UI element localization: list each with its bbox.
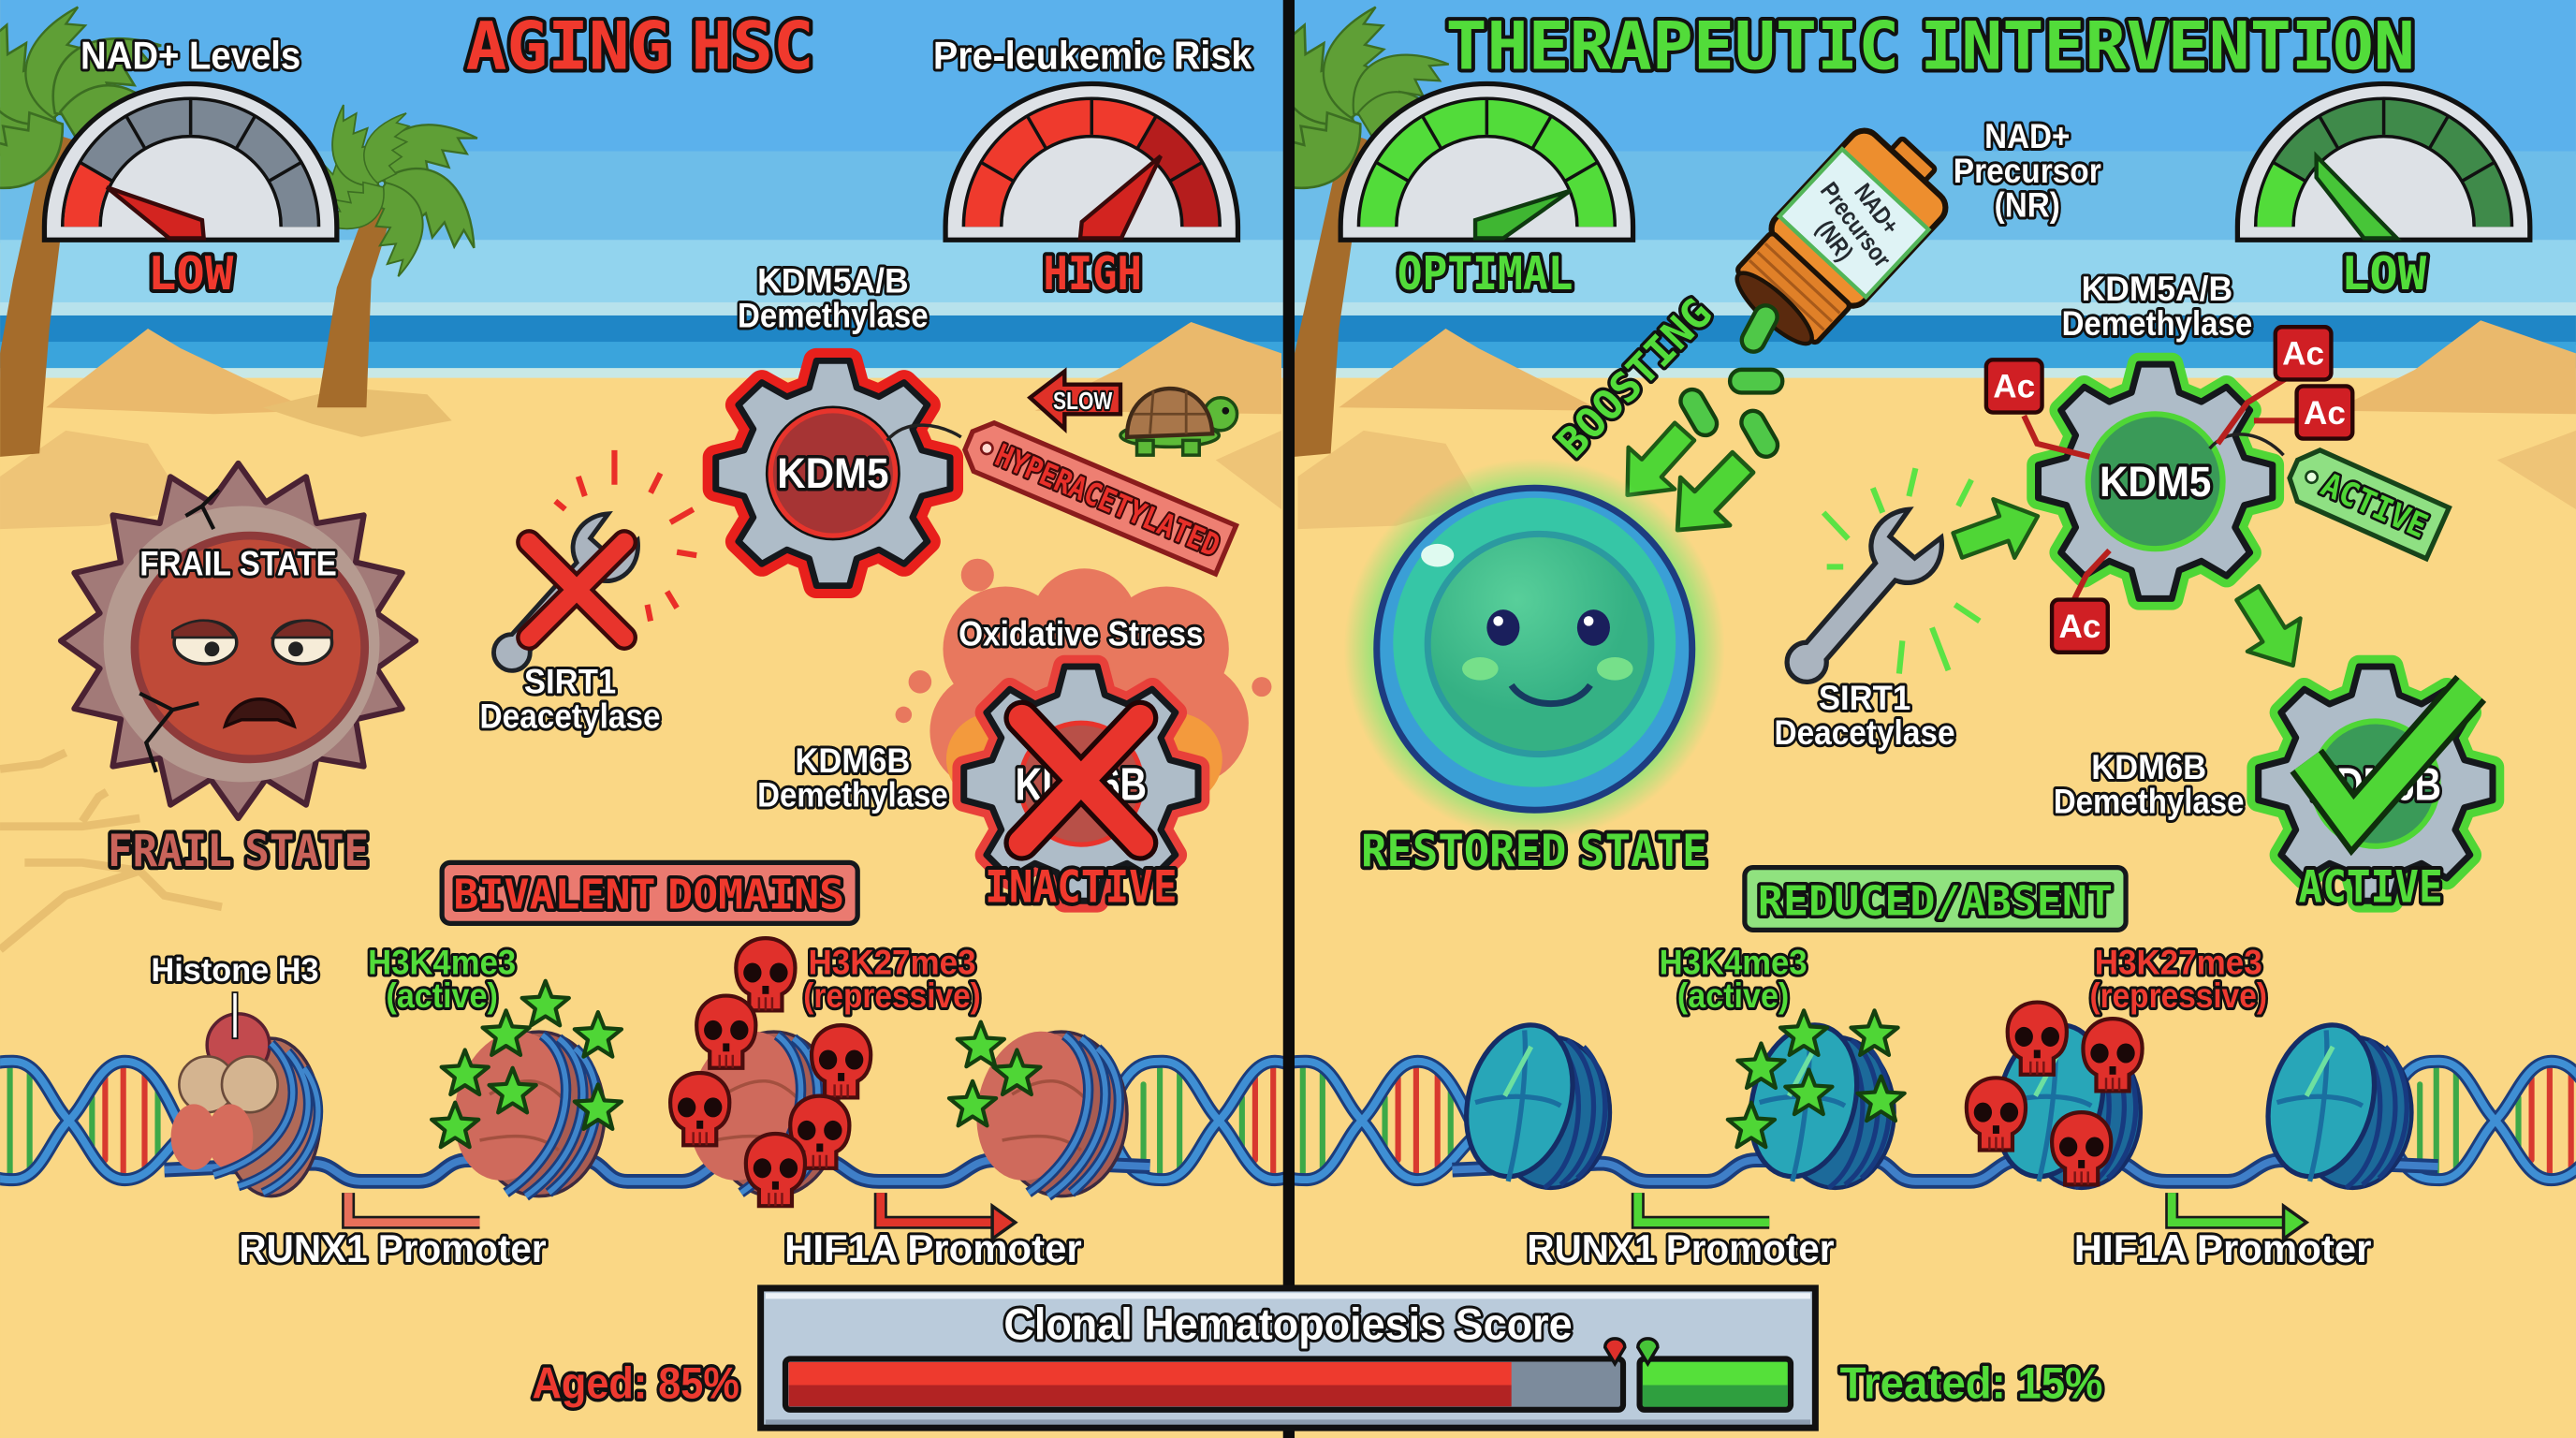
gauge status: OPTIMAL: OPTIMAL	[1398, 246, 1573, 301]
gauge: NAD+ low	[44, 84, 337, 240]
label: KDM5A/B right: Demethylase	[2062, 304, 2252, 343]
label: H3K4me3 left	[368, 944, 516, 1015]
gear: KDM6B inactive: KDM6B	[1016, 760, 1147, 811]
label: H3K4me3 left: H3K4me3	[368, 944, 516, 982]
icon: turtle	[1120, 389, 1237, 455]
arrow: SIRT1 to KDM5	[1947, 487, 2048, 575]
title: therapeutic intervention: THERAPEUTIC INTERVENTION	[1445, 8, 2415, 85]
score value: aged: Aged: 85%	[533, 1359, 739, 1409]
nucleosome: histone H3	[171, 992, 320, 1196]
promoter arrow: HIF1A right	[2172, 1193, 2306, 1239]
score title: Clonal Hematopoiesis Score	[1003, 1299, 1573, 1349]
label: RUNX1 promoter right: RUNX1 Promoter	[1527, 1226, 1835, 1270]
slow arrow: SLOW	[1053, 387, 1112, 415]
acetyl groups: Ac	[2304, 395, 2346, 432]
label: NAD+ precursor: (NR)	[1995, 186, 2060, 225]
label: H3K27me3 left: (repressive)	[803, 976, 981, 1015]
label: NAD+ precursor: NAD+	[1984, 117, 2070, 155]
gear: KDM6B inactive	[964, 667, 1198, 901]
status: active: ACTIVE	[2298, 862, 2443, 914]
arrow: boosting 2	[1653, 438, 1767, 554]
label: KDM6B left: Demethylase	[757, 776, 948, 814]
nucleosome with H3K27me3 skulls left	[670, 938, 871, 1206]
label: oxidative stress: Oxidative Stress	[959, 615, 1204, 653]
gauge status: LOW treated: LOW	[2341, 246, 2427, 301]
arrow: boosting 1	[1604, 411, 1707, 516]
label: NAD+ precursor: Precursor	[1954, 152, 2101, 190]
pill bottle: NAD+ precursor: (NR)	[1811, 215, 1859, 266]
palm tree right panel	[1295, 6, 1449, 457]
pill bottle: NAD+ precursor: NAD+	[1849, 178, 1905, 240]
label: H3K27me3 right: H3K27me3	[2095, 944, 2262, 982]
label: NAD+ precursor	[1954, 117, 2101, 225]
pill bottle: NAD+ precursor	[1720, 112, 1964, 360]
label: RUNX1 promoter left: RUNX1 Promoter	[239, 1226, 547, 1270]
gear: KDM6B active	[2259, 667, 2493, 901]
tag: hyperacetylated: HYPERACETYLATED	[990, 436, 1225, 564]
badge: reduced absent: REDUCED/ABSENT	[1758, 878, 2113, 926]
label: KDM5A/B left: Demethylase	[738, 296, 929, 334]
label: pre-leukemic risk: Pre-leukemic Risk	[933, 34, 1252, 78]
status: inactive: INACTIVE	[985, 862, 1178, 914]
label: KDM5A/B left: KDM5A/B	[757, 261, 909, 300]
badge: bivalent domains: BIVALENT DOMAINS	[453, 872, 844, 919]
restored cell	[1344, 459, 1725, 840]
palm trees	[0, 3, 497, 457]
label: H3K27me3 right	[2089, 944, 2267, 1015]
label: SIRT1 deacetylase left: Deacetylase	[480, 697, 661, 735]
aged score bar	[785, 1358, 1623, 1410]
label: KDM6B left: KDM6B	[795, 741, 910, 780]
gear: KDM6B active: KDM6B	[2310, 760, 2441, 811]
label: SIRT1 deacetylase right: Deacetylase	[1774, 713, 1955, 752]
label: KDM5A/B left	[738, 261, 929, 334]
nucleosome teal 1	[1450, 1013, 1610, 1189]
promoter arrow: HIF1A left	[881, 1193, 1016, 1239]
gauge: pre-leukemic risk high	[945, 84, 1237, 240]
label: SIRT1 deacetylase left: SIRT1	[524, 663, 616, 701]
label: boosting: BOOSTING	[1548, 289, 1721, 467]
gear: KDM5 active: KDM5	[2100, 458, 2211, 506]
acetyl groups	[1986, 327, 2352, 653]
label: restored state: RESTORED STATE	[1361, 826, 1707, 877]
label: SIRT1 deacetylase left	[480, 663, 661, 735]
tag: active: ACTIVE	[2316, 465, 2433, 546]
tag: active	[2282, 444, 2449, 559]
nucleosome teal with stars	[1728, 1010, 1905, 1189]
gear: KDM5 hyperacetylated	[716, 360, 961, 586]
acetyl groups: Ac	[1993, 369, 2035, 405]
nucleosome teal with skulls	[1967, 1003, 2143, 1189]
tag: hyperacetylated	[959, 417, 1237, 574]
acetyl groups: Ac	[2058, 609, 2100, 645]
label: H3K27me3 right: (repressive)	[2089, 976, 2267, 1015]
explosion: oxidative stress	[896, 559, 1271, 805]
sirt1 broken wrench	[476, 450, 696, 687]
wrench: active SIRT1	[1767, 468, 1980, 700]
DNA strand right panel	[1251, 1062, 2576, 1181]
slow arrow	[1030, 372, 1120, 429]
label: SIRT1 deacetylase right: SIRT1	[1819, 679, 1910, 717]
label: HIF1A promoter left: HIF1A Promoter	[784, 1226, 1082, 1270]
label: H3K4me3 right	[1660, 944, 1808, 1015]
label: histone H3: Histone H3	[152, 952, 319, 989]
marker: aged	[1605, 1339, 1625, 1364]
label: H3K4me3 left: (active)	[386, 976, 498, 1015]
label: KDM6B left	[757, 741, 948, 814]
acetyl groups: Ac	[2282, 336, 2324, 373]
gear: KDM5 active	[2039, 364, 2284, 598]
gauge status: HIGH: HIGH	[1044, 246, 1142, 301]
title: aging hsc: AGING HSC	[466, 8, 814, 85]
label: KDM5A/B right	[2062, 270, 2252, 343]
treated score bar	[1640, 1358, 1791, 1410]
label: NAD+ levels: NAD+ Levels	[80, 34, 300, 78]
label: KDM6B right	[2054, 748, 2244, 821]
frail state label: FRAIL STATE	[108, 826, 369, 877]
label: H3K4me3 right: (active)	[1677, 976, 1789, 1015]
score value: treated: Treated: 15%	[1840, 1359, 2102, 1409]
panel divider	[1283, 0, 1295, 1438]
label: HIF1A promoter right: HIF1A Promoter	[2074, 1226, 2371, 1270]
nucleosome with stars left 2	[949, 1020, 1127, 1196]
gauge: NAD+ optimal	[1340, 84, 1633, 240]
frail state caption inside cell: FRAIL STATE	[139, 544, 337, 582]
label: H3K27me3 left: H3K27me3	[809, 944, 976, 982]
pill bottle: NAD+ precursor: Precursor	[1815, 177, 1896, 272]
label: KDM6B right: KDM6B	[2091, 748, 2206, 786]
gauge status: LOW: LOW	[148, 246, 234, 301]
label: KDM5A/B right: KDM5A/B	[2082, 270, 2232, 308]
badge: reduced absent	[1745, 868, 2126, 930]
label: H3K4me3 right: H3K4me3	[1660, 944, 1808, 982]
promoter arrow: RUNX1 right	[1638, 1193, 1769, 1223]
gauge: risk low	[2237, 84, 2530, 240]
promoter arrow: RUNX1 left	[348, 1193, 480, 1223]
gear: KDM5 hyperacetylated: KDM5	[777, 449, 889, 497]
score panel: clonal hematopoiesis	[761, 1288, 1815, 1428]
DNA strand left panel	[0, 1062, 1334, 1181]
label: SIRT1 deacetylase right	[1774, 679, 1955, 752]
nucleosome with H3K4me3 stars left	[432, 981, 622, 1196]
label: H3K27me3 left	[803, 944, 981, 1015]
frail cell	[61, 463, 416, 818]
arrow: KDM5 to KDM6B	[2221, 577, 2320, 682]
falling pills	[1676, 301, 1782, 461]
nucleosome teal 4	[2252, 1013, 2411, 1189]
label: KDM6B right: Demethylase	[2054, 783, 2244, 821]
marker: treated	[1638, 1339, 1658, 1364]
